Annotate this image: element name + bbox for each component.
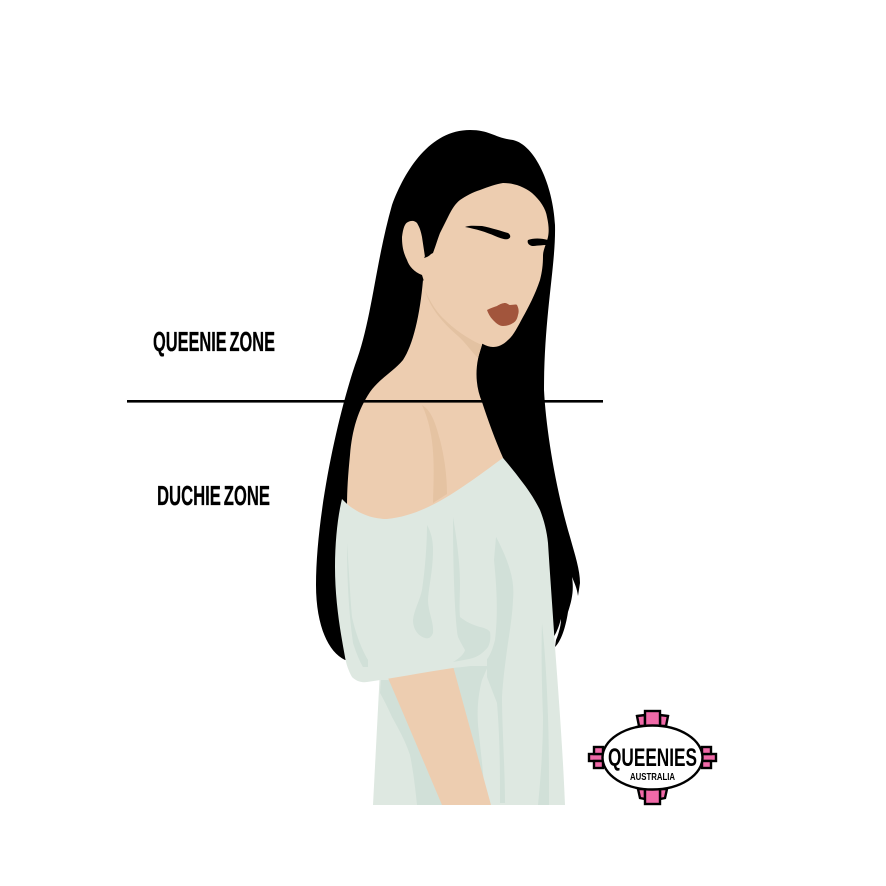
hair (316, 130, 580, 660)
heading: queenie zone: QUEENIE ZONE (153, 326, 275, 357)
illustration: woman in off-shoulder top (316, 130, 580, 805)
neck and shoulder (347, 280, 504, 530)
right eyebrow (528, 238, 548, 246)
left eyebrow (465, 226, 510, 239)
forearm (388, 666, 491, 805)
logo wordmark: QUEENIES (608, 744, 697, 772)
logo subtitle: AUSTRALIA (630, 771, 675, 783)
shoulder shadow (422, 405, 447, 503)
zone divider line (127, 400, 603, 403)
logo ornaments (589, 711, 716, 804)
shirt body (373, 458, 565, 805)
logo oval (602, 726, 702, 790)
neck shadow (425, 290, 482, 358)
sleeve (335, 458, 503, 682)
lips (487, 303, 519, 326)
shirt body folds (380, 680, 450, 805)
logo: Queenies Australia (589, 711, 716, 804)
ear detail (423, 238, 434, 258)
sleeve folds (413, 525, 433, 638)
heading: duchie zone: DUCHIE ZONE (157, 480, 270, 511)
face and ear (402, 183, 549, 347)
